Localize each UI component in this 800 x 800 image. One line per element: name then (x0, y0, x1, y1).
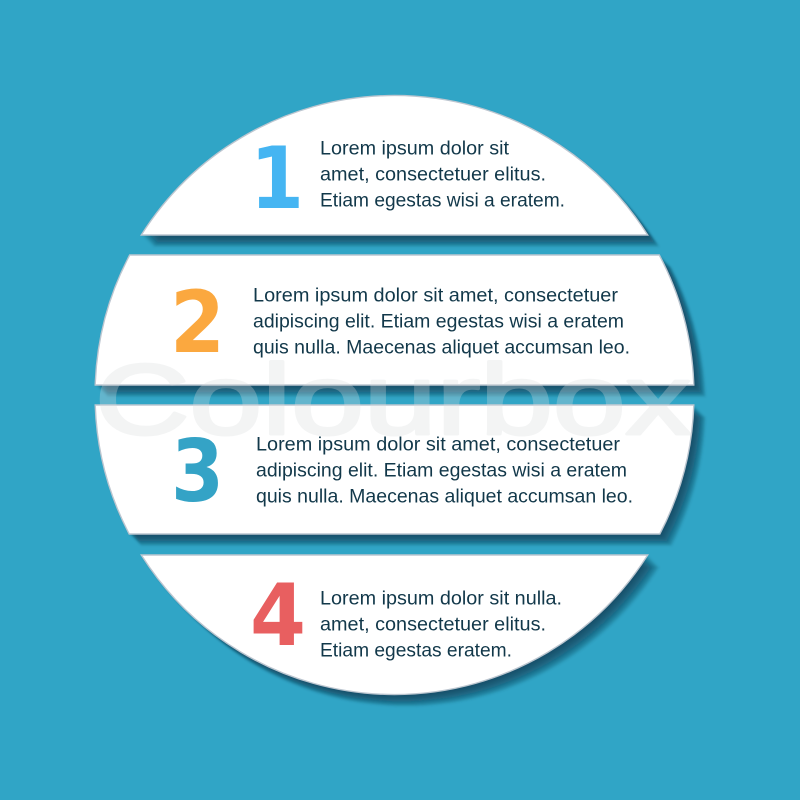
panel: step 4 (141, 555, 660, 707)
text block 1 (320, 138, 565, 212)
text block 4: Lorem ipsum dolor sit nulla. (320, 588, 562, 610)
panel: step 2 (95, 255, 706, 397)
number 2: 2 (170, 273, 225, 373)
text block 3: adipiscing elit. Etiam egestas wisi a eratem (256, 460, 627, 482)
text block 4: amet, consectetuer elitus. (320, 614, 546, 636)
text block 2: adipiscing elit. Etiam egestas wisi a eratem (253, 310, 624, 332)
text block 4: Etiam egestas eratem. (320, 640, 512, 662)
text block 2: Lorem ipsum dolor sit amet, consectetuer (253, 284, 619, 306)
text block 3: quis nulla. Maecenas aliquet accumsan leo. (256, 486, 633, 508)
text block 1: Etiam egestas wisi a eratem. (320, 190, 565, 212)
text block 1: amet, consectetuer elitus. (320, 164, 546, 186)
text block 4 (320, 588, 562, 662)
text block 2: quis nulla. Maecenas aliquet accumsan leo. (253, 336, 630, 358)
number 4: 4 (250, 566, 306, 666)
text block 1: Lorem ipsum dolor sit (320, 138, 510, 160)
number 3: 3 (171, 422, 224, 522)
panel: step 3 (95, 405, 706, 546)
text block 3: Lorem ipsum dolor sit amet, consectetuer (256, 434, 621, 456)
watermark: Colourbox (95, 344, 691, 456)
number 1: 1 (250, 129, 304, 229)
text block 2 (253, 284, 630, 358)
panel: step 1 (141, 95, 660, 247)
text block 3 (256, 434, 633, 508)
